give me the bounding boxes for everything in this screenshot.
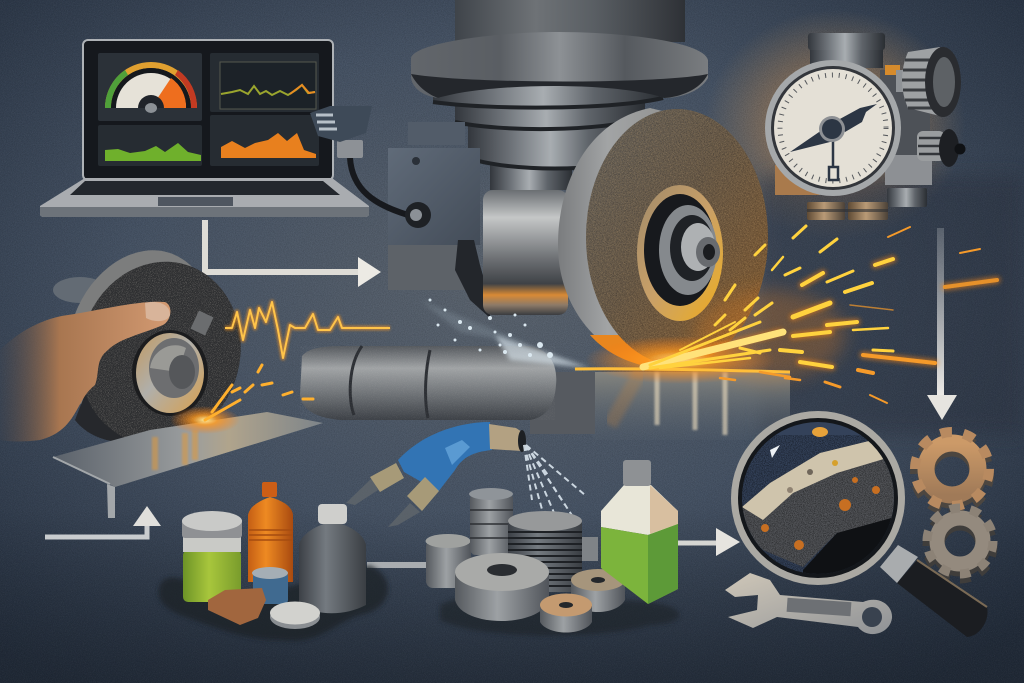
spark glow bbox=[650, 259, 997, 367]
grinding wheel bbox=[558, 108, 768, 367]
dark metal can bbox=[299, 504, 366, 613]
magnifying glass bbox=[731, 411, 988, 637]
arrow: consumables to magnifier bbox=[367, 528, 740, 565]
panel: gauge dial bbox=[98, 53, 202, 121]
handle bbox=[880, 545, 988, 637]
side knob bbox=[917, 129, 966, 167]
orange bottle bbox=[248, 482, 293, 582]
signal waveform bbox=[225, 302, 390, 358]
gear: gray bbox=[927, 508, 993, 579]
machine housing block bbox=[388, 122, 490, 318]
connector and cable bbox=[310, 106, 431, 228]
round tablet bbox=[270, 602, 320, 629]
pressure gauge instrument bbox=[765, 33, 966, 220]
metal plate with sparks bbox=[53, 365, 323, 518]
consumable containers bbox=[159, 482, 388, 641]
laptop base bbox=[40, 178, 369, 217]
metal discs group bbox=[426, 488, 679, 636]
gauge body bbox=[775, 65, 932, 195]
panel: line chart bbox=[210, 53, 319, 112]
gear: bronze bbox=[915, 432, 989, 511]
keyboard bbox=[70, 181, 340, 195]
panel: green area chart bbox=[98, 125, 202, 166]
blue body bbox=[398, 422, 492, 492]
gauge needle bbox=[790, 104, 877, 180]
spark beams bbox=[643, 226, 893, 368]
large ring bbox=[455, 553, 549, 621]
wrench bbox=[725, 573, 892, 634]
hand bbox=[0, 302, 170, 442]
laptop bbox=[40, 40, 369, 217]
sparks: main bbox=[575, 226, 997, 403]
adjuster knob bbox=[896, 47, 961, 117]
arrow: laptop to machine bbox=[205, 220, 381, 287]
hand and small wheel bbox=[5, 250, 241, 442]
blue small jar bbox=[252, 567, 288, 604]
small wheel bbox=[75, 250, 241, 441]
coolant nozzle bbox=[346, 422, 526, 527]
plate sparks bbox=[205, 365, 313, 420]
panel: orange area chart bbox=[210, 115, 319, 166]
top cap bbox=[808, 33, 885, 68]
magnified texture bbox=[740, 420, 897, 580]
laptop screen bbox=[83, 40, 333, 180]
arrow: machine to inspection bbox=[927, 228, 957, 420]
gears bbox=[915, 432, 993, 579]
arrow: bottom left up bbox=[45, 506, 161, 537]
lower rings bbox=[433, 76, 663, 190]
gray nozzle tips bbox=[346, 478, 420, 527]
brown block bbox=[208, 588, 266, 625]
trackpad bbox=[158, 197, 233, 206]
spindle shaft bbox=[483, 190, 568, 315]
green jar bbox=[182, 511, 242, 602]
small rings bbox=[571, 569, 625, 612]
workpiece cylinder and block bbox=[300, 346, 790, 440]
spark streaks bbox=[720, 227, 997, 403]
machine column and flange bbox=[411, 0, 708, 190]
tan collars bbox=[370, 463, 439, 511]
wheel hub bbox=[637, 185, 723, 321]
bottom drums bbox=[807, 188, 927, 220]
white-green bottle bbox=[601, 460, 678, 604]
dark pool shadow bbox=[159, 565, 388, 641]
coolant spray bbox=[420, 298, 590, 368]
water spray bbox=[524, 445, 585, 520]
